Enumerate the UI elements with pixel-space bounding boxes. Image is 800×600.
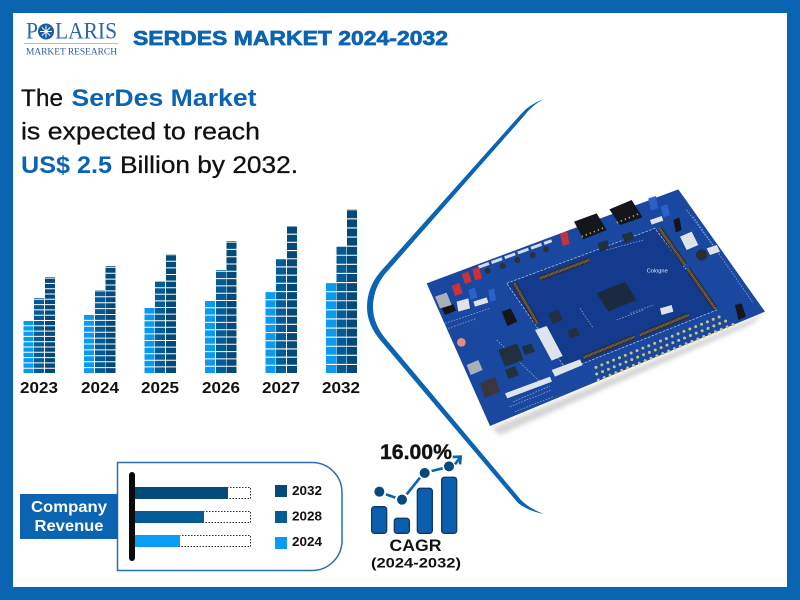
header pins [582,213,640,237]
gold pad rows [596,316,733,380]
logo: Polaris Market Research: MARKET RESEARCH [26,48,117,58]
headline text block: is expected to reach [21,118,260,146]
usb port [435,293,452,308]
logo: Polaris Market Research: P [26,18,38,44]
bars 2023 [28,277,50,373]
panel: company revenue [20,462,342,570]
inner board region [507,228,717,370]
revenue panel outline [118,462,342,570]
year labels [20,380,360,397]
bar chart: market growth by year [28,209,352,373]
legend [275,483,323,549]
year labels: 2027 [262,380,300,397]
legend: 2024 [292,534,323,549]
red jumpers [452,232,569,296]
year labels: 2024 [81,380,119,397]
bars 2026 [210,241,232,373]
bars 2027 [270,226,292,373]
company revenue label: Company [31,499,107,516]
company revenue label [20,494,118,539]
company revenue label: Revenue [34,518,104,535]
secondary chips [498,232,634,379]
bar 2024 [134,535,250,547]
headline text block [21,85,298,179]
icon: growth chart [372,457,461,533]
bar 2032 [134,487,250,499]
orange push button [457,338,466,347]
long connectors [514,228,715,357]
headline text block: US$ 2.5 [21,152,112,179]
year labels: 2026 [202,380,240,397]
white silkscreen strip with components [478,241,552,274]
bars 2025 [150,254,171,373]
CAGR value: 16.00% [380,441,452,464]
logo: Polaris Market Research [24,18,118,58]
black axis [129,472,135,561]
CAGR period: (2024-2032) [371,554,461,570]
title: SERDES MARKET 2024-2032 [133,27,448,50]
silkscreen texture [445,210,753,412]
blue jumpers [468,196,670,302]
main chip [597,282,637,312]
legend: 2028 [292,508,322,524]
curved chevron divider [367,99,544,514]
board shadow [492,314,763,435]
usb port lower [467,360,483,375]
legend: 2032 [292,483,322,498]
year labels: 2023 [20,380,58,397]
black tact switch [696,249,707,261]
logo: Polaris Market Research: LARIS [55,18,117,44]
year labels: 2032 [322,380,360,397]
CAGR callout [371,441,461,570]
dip header [480,377,500,398]
headline text block: The [21,85,63,112]
product photo: SerDes circuit board [427,189,765,435]
headline text block: SerDes Market [72,85,256,112]
bars 2024 [89,266,110,373]
bars 2032 [331,209,352,373]
headline text block: Billion by 2032. [120,152,298,179]
CAGR label: CAGR [390,536,442,555]
board brand: Cologne [647,269,668,275]
bar 2028 [134,511,250,523]
white label blocks [457,216,720,398]
black headers [442,200,746,326]
year labels: 2025 [141,380,179,397]
board body [427,189,765,426]
